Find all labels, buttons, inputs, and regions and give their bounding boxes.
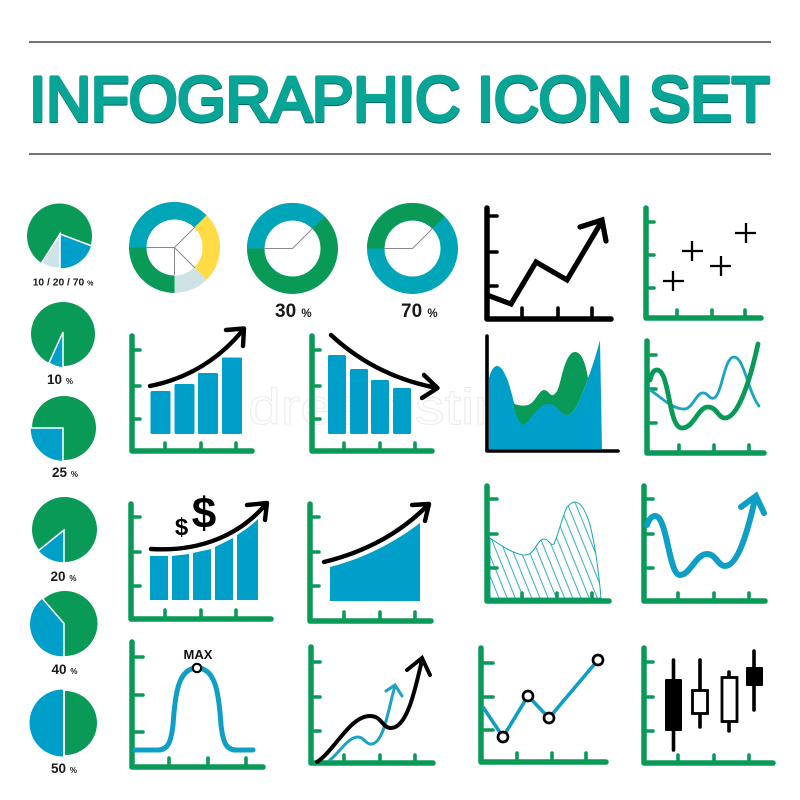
blue line [650,357,759,409]
green line [650,344,758,428]
chart: bars rising [132,328,252,451]
donut: 30 percent [256,212,329,322]
pie: 40 percent [29,591,98,677]
chart: black rising line [487,208,611,319]
chart: hatched area [487,486,609,601]
green area [513,352,588,425]
top rule [29,41,771,43]
chart: area with arrow [310,504,431,621]
label: 50 % [51,761,77,776]
pie: 10 / 20 / 70 percent [27,204,94,288]
chart: candlesticks [644,648,773,763]
bars [328,355,346,434]
blue arrow [330,685,402,760]
wicks [674,651,754,750]
chart: double arrows [311,647,433,763]
chart: overlapping area [487,336,618,451]
arrow [150,328,244,386]
label: 40 % [52,662,77,677]
plus markers [663,223,756,291]
arrow [151,503,267,549]
donut: 70 percent [376,212,449,322]
arrow line [487,220,606,304]
label: 70 % [401,301,438,322]
blue area [489,340,602,449]
label: 20 % [51,569,76,584]
bottom rule [29,153,771,155]
chart: bell curve with max [132,642,263,767]
chart: dollar bars [131,489,271,619]
pie: 20 percent [32,497,97,584]
chart: two wavy lines [647,341,764,453]
title: INFOGRAPHIC ICON SET [29,64,770,134]
dollar signs: $ [192,489,216,538]
watermark: dreamstime [248,379,556,435]
label: 10 / 20 / 70 % [33,278,94,288]
curve arrow [647,496,764,575]
axes [487,486,609,601]
label: 30 % [275,301,312,322]
chart: dollar bars: $ [175,514,189,541]
data points [498,732,508,742]
bars [150,391,170,434]
chart: bars falling [312,335,438,451]
label: 10 % [47,372,73,387]
chart: scatter plot [646,208,761,318]
pie: 50 percent [30,690,97,776]
bars [150,519,258,600]
max marker [193,664,201,672]
candle bodies [665,679,682,731]
line [483,660,598,737]
area [330,523,420,601]
curve [135,668,253,750]
axes [487,336,618,451]
black arrow [317,658,430,762]
donut: four segments [138,211,211,284]
max label: MAX [184,647,213,662]
chart: line with dots [481,648,606,762]
pie: 10 percent [31,302,95,387]
chart: blue arrow curve [644,486,765,601]
label: 25 % [52,465,78,480]
arrow [324,504,429,562]
pie: 25 percent [30,396,96,480]
arrow [331,335,438,398]
